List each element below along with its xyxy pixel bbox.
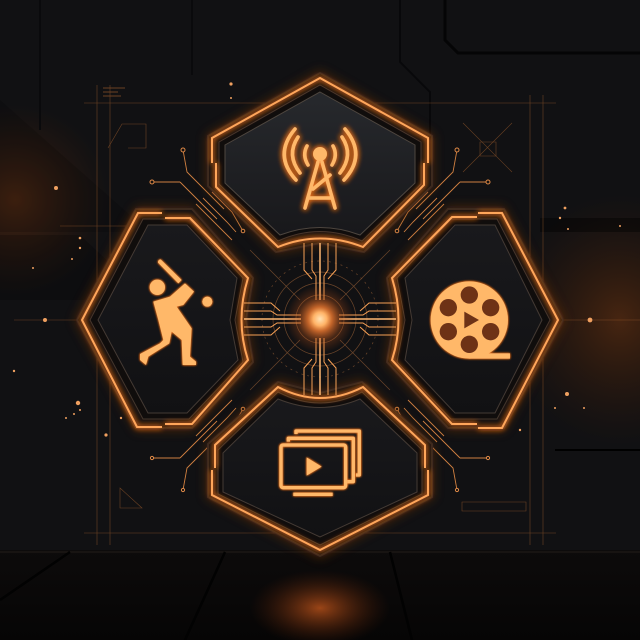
glowing core <box>286 285 354 353</box>
floor with orange reflection <box>0 550 640 640</box>
icon: radio tower <box>284 129 356 208</box>
icon: film reel <box>431 281 510 359</box>
panel: top hexagon <box>206 70 434 254</box>
panel: left hexagon <box>74 206 255 431</box>
technical grid lines and corner marks <box>14 85 640 545</box>
panel: bottom hexagon <box>206 379 434 559</box>
central hub <box>244 243 396 395</box>
panel: right hexagon <box>385 206 566 431</box>
hub circuit buses <box>244 243 396 395</box>
icon: cricket batter <box>140 259 212 365</box>
circuit traces between panels <box>150 148 490 492</box>
icon: video playlist <box>281 431 359 494</box>
scattered light particles <box>13 82 621 437</box>
